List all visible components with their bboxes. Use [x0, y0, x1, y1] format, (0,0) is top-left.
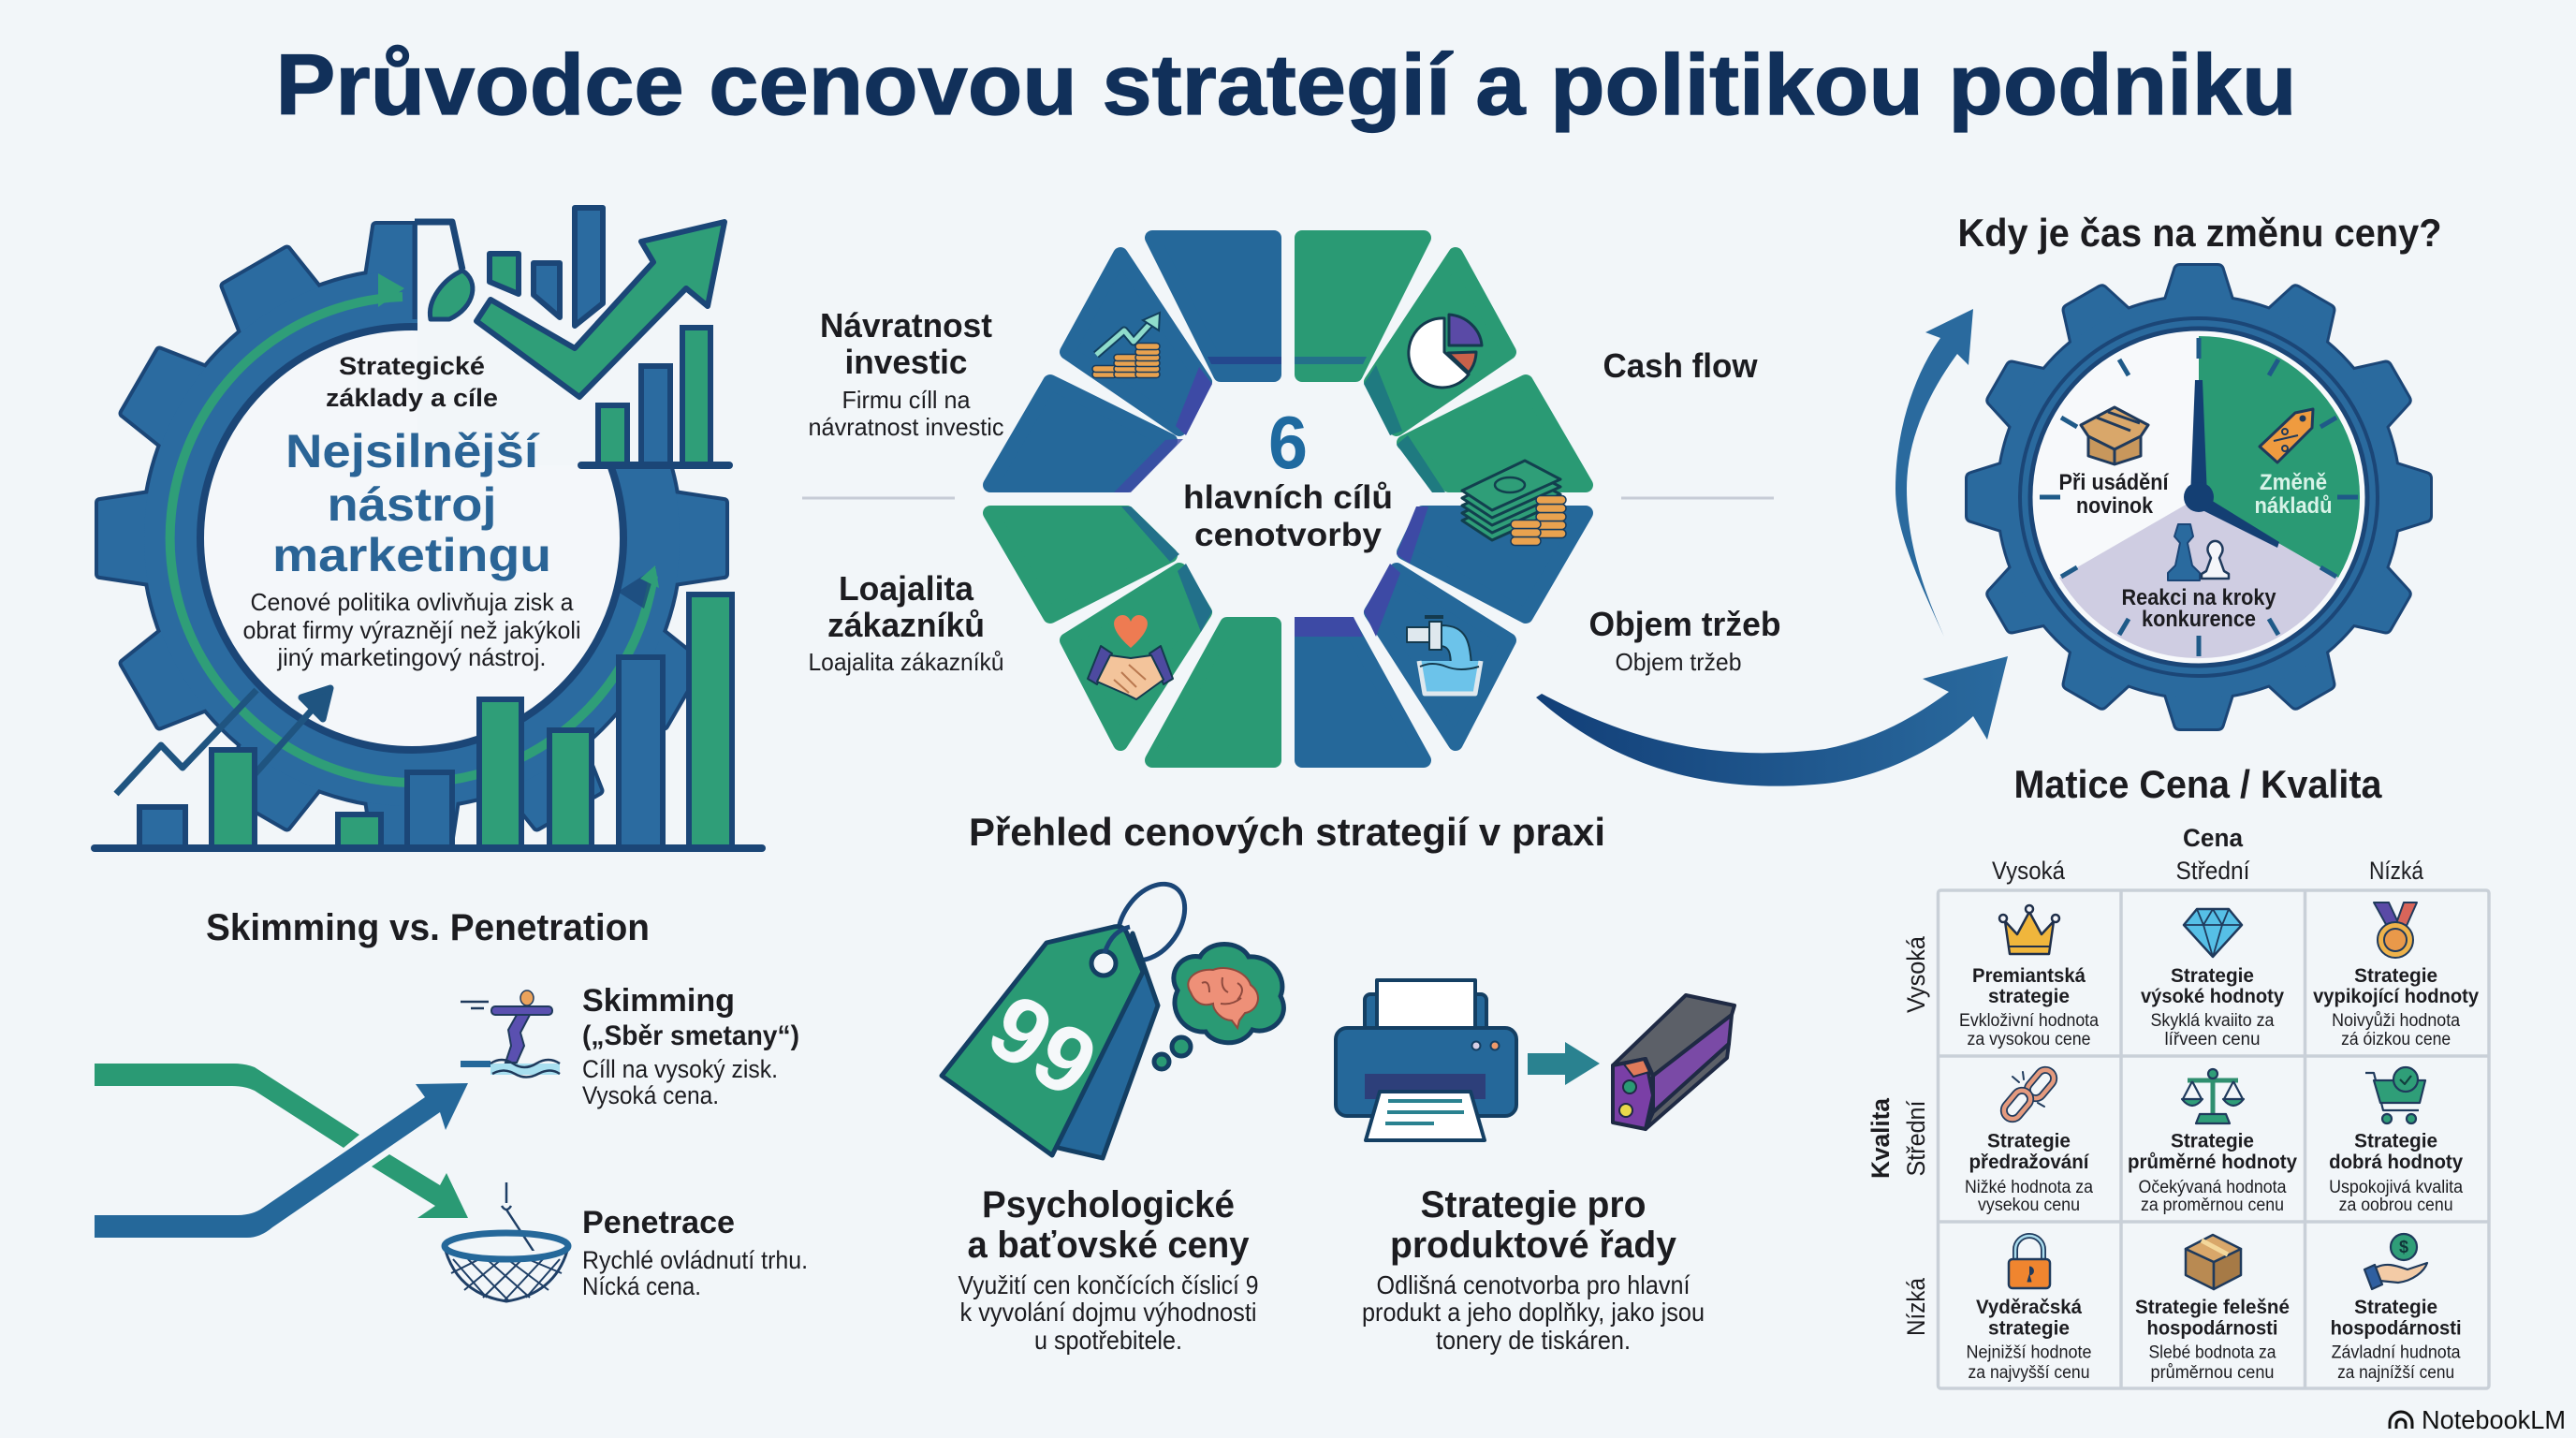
panel: price quality matrix: [1866, 762, 2489, 1388]
cell: outstanding value strategy: Strategie: [2354, 965, 2437, 987]
icon: medal: [2374, 902, 2417, 958]
icon: growth and coins: [1092, 313, 1160, 378]
icon: shopping cart: [2365, 1067, 2425, 1123]
heading: strongest marketing tool: nástroj: [328, 478, 496, 531]
label: sales volume: [1589, 605, 1780, 676]
cell: high value strategy: Skyklá kvaiito za: [2151, 1011, 2275, 1031]
cell: premium strategy: strategie: [1988, 986, 2070, 1007]
icon: broken chain: [2000, 1066, 2057, 1123]
cell: overcharging strategy: Nižké hodnota za: [1965, 1178, 2093, 1197]
cell: average value strategy: [2128, 1069, 2297, 1215]
text: pricing policy description: jiný marketingový nástroj.: [277, 643, 547, 671]
axis: price: Nízká: [2369, 857, 2424, 885]
icon: chess pieces: [2168, 524, 2229, 580]
hexagon segments: [990, 238, 1586, 760]
text: psychological pricing: u spotřebitele.: [1034, 1326, 1182, 1355]
cell: false economy strategy: [2135, 1235, 2290, 1383]
icon: padlock: [2009, 1236, 2050, 1288]
cell: average value strategy: Strategie: [2171, 1131, 2254, 1152]
arrow: printer to toner: [1528, 1042, 1600, 1085]
panel: skimming vs penetration: [95, 907, 808, 1301]
arrow: upward curved arrow: [1895, 309, 1973, 637]
cell: premium strategy: Premiantská: [1972, 965, 2086, 987]
text: penetration: Penetrace: [582, 1205, 735, 1240]
axis: quality: Vysoká: [1902, 935, 1930, 1013]
cell: outstanding value strategy: zá óizkou cene: [2341, 1030, 2451, 1049]
panel: pricing strategies in practice: [942, 810, 1734, 1355]
icon: hand with coin: [2364, 1234, 2427, 1289]
axis: price: Cena: [2183, 824, 2244, 852]
icon: rising green arrow: [476, 222, 724, 397]
label: cash flow: Cash flow: [1603, 346, 1758, 385]
text: penetration: [582, 1205, 808, 1300]
bar chart: bottom bars: [95, 594, 762, 848]
text: penetration: Nícká cena.: [582, 1272, 701, 1300]
text: psychological pricing: Psychologické: [982, 1184, 1235, 1225]
clock sector: costs: [2199, 336, 2360, 578]
panel: six pricing goals hexagon: [802, 238, 1780, 760]
cell: premium strategy: [1959, 905, 2099, 1049]
label: customer loyalty: [809, 569, 1003, 676]
cell: average value strategy: za proměrnou cenu: [2141, 1196, 2284, 1215]
heading: strongest marketing tool: marketingu: [272, 529, 551, 581]
cell: false economy strategy: průměrnou cenu: [2151, 1363, 2275, 1383]
axis: price: Vysoká: [1992, 857, 2066, 885]
text: competitor reaction: konkurence: [2142, 607, 2256, 632]
axis: price: Střední: [2175, 857, 2250, 885]
cell: economy strategy: hospodárnosti: [2331, 1318, 2462, 1339]
cell: economy strategy: $: [2399, 1238, 2408, 1256]
icon: price tag: [2260, 409, 2313, 462]
cell: overcharging strategy: Strategie: [1987, 1131, 2071, 1152]
text: strategic label: základy a cíle: [326, 384, 498, 412]
cell: extortion strategy: Vyděračská: [1976, 1297, 2082, 1318]
cell: extortion strategy: [1966, 1236, 2091, 1383]
clock sector: competitors: [2059, 497, 2338, 658]
icon: price tags 99: 99: [971, 974, 1115, 1118]
cell: high value strategy: lířveen cenu: [2164, 1030, 2260, 1049]
cell: overcharging strategy: vysekou cenu: [1978, 1196, 2080, 1215]
heading: skimming vs penetration: Skimming vs. Penetration: [206, 907, 650, 948]
heading: matrix: Matice Cena / Kvalita: [2014, 762, 2382, 806]
icon: money stack with coins: [1462, 461, 1566, 545]
cell: outstanding value strategy: vypikojící hodnoty: [2313, 986, 2479, 1007]
cell: extortion strategy: za najvyšší cenu: [1968, 1363, 2089, 1383]
icon: top rising bars: [490, 208, 603, 326]
text: competitor reaction: [2121, 585, 2276, 632]
text: cost change: Změně: [2260, 470, 2327, 495]
text: product line strategies: [1362, 1184, 1705, 1355]
text: skimming: Cíll na vysoký zisk.: [582, 1055, 778, 1083]
axis: quality: Střední: [1902, 1100, 1930, 1176]
text: skimming: Vysoká cena.: [582, 1081, 719, 1109]
text: penetration: Rychlé ovládnutí trhu.: [582, 1246, 808, 1274]
text: strategic label: [326, 352, 498, 412]
heading: when to change price: Kdy je čas na změnu ceny?: [1958, 211, 2441, 255]
cell: extortion strategy: strategie: [1988, 1318, 2070, 1339]
label: return on investment: Návratnost: [820, 306, 992, 345]
cell: economy strategy: [2331, 1234, 2462, 1383]
icon: clock gear: [1968, 266, 2430, 728]
icon: pie chart: [1409, 315, 1482, 388]
heading: pricing strategies overview: Přehled cenových strategií v praxi: [969, 810, 1605, 854]
cell: high value strategy: Strategie: [2171, 965, 2254, 987]
label: return on investment: [809, 306, 1003, 441]
heading: strongest marketing tool: [272, 425, 551, 581]
cell: high value strategy: výsoké hodnoty: [2141, 986, 2284, 1007]
cell: premium strategy: za vysokou cene: [1968, 1030, 2091, 1049]
matrix grid: [1938, 890, 2489, 1388]
text: skimming: („Sběr smetany“): [582, 1020, 799, 1051]
text: new products: Při usádění: [2059, 470, 2170, 495]
cell: false economy strategy: Strategie felešné: [2135, 1297, 2290, 1318]
label: return on investment: Firmu cíll na: [842, 386, 971, 414]
hexagon inner bands: [1114, 357, 1445, 637]
text: skimming: [582, 983, 799, 1109]
label: customer loyalty: Loajalita: [839, 569, 974, 608]
icon: open box: [2081, 407, 2148, 464]
cell: good value strategy: dobrá hodnoty: [2329, 1152, 2463, 1173]
axis: price: [1992, 824, 2424, 885]
cell: economy strategy: Strategie: [2354, 1297, 2437, 1318]
arrow: green down to penetration: [95, 1064, 468, 1218]
axis: quality: Kvalita: [1866, 1097, 1895, 1179]
icon: cardboard box: [2186, 1235, 2241, 1289]
panel: strategic foundations gear: [84, 178, 777, 888]
text: product line strategies: tonery de tiskáren.: [1436, 1326, 1631, 1355]
cell: outstanding value strategy: [2313, 902, 2479, 1049]
icon: green arc arrowheads: [378, 273, 659, 609]
icon: thought bubble with brain: [1154, 944, 1283, 1069]
cell: outstanding value strategy: Noivyůži hodnota: [2332, 1011, 2460, 1031]
cell: good value strategy: za oobrou cenu: [2339, 1196, 2453, 1215]
icon: handshake with heart: [1088, 615, 1173, 699]
label: customer loyalty: Loajalita zákazníků: [809, 648, 1003, 676]
text: product line strategies: produktové řady: [1390, 1225, 1677, 1266]
logo: NotebookLM: NotebookLM: [2422, 1405, 2566, 1434]
text: psychological pricing: a baťovské ceny: [968, 1225, 1250, 1266]
icon: landing net: [445, 1182, 568, 1301]
text: product line strategies: produkt a jeho doplňky, jako jsou: [1362, 1298, 1705, 1327]
text: pricing policy description: [243, 588, 580, 671]
center label: six goals: [1183, 401, 1393, 553]
label: sales volume: Objem tržeb: [1616, 648, 1741, 676]
icon: printer: [1336, 980, 1516, 1140]
arrow: curved connector from hexagon to clock gear: [1536, 656, 2008, 786]
label: customer loyalty: zákazníků: [827, 606, 985, 644]
cell: false economy strategy: hospodárnosti: [2147, 1318, 2278, 1339]
cell: false economy strategy: Slebé bodnota za: [2149, 1343, 2276, 1363]
icon: large gear: [98, 225, 725, 852]
text: cost change: nákladů: [2254, 493, 2333, 519]
cell: economy strategy: za najnížší cenu: [2337, 1363, 2454, 1383]
cell: average value strategy: průměrné hodnoty: [2128, 1152, 2297, 1173]
gear cutout for rising chart: [417, 178, 754, 465]
cell: overcharging strategy: předražování: [1969, 1152, 2090, 1173]
text: product line strategies: Odlišná cenotvorba pro hlavní: [1376, 1270, 1690, 1299]
icon: toner cartridge: [1613, 995, 1734, 1129]
cell: good value strategy: Uspokojivá kvalita: [2329, 1178, 2463, 1197]
label: return on investment: návratnost investic: [809, 413, 1003, 441]
text: psychological pricing: k vyvolání dojmu výhodnosti: [960, 1298, 1256, 1327]
text: new products: novinok: [2076, 493, 2154, 519]
icon: small trend arrows: [116, 688, 330, 794]
text: skimming: Skimming: [582, 983, 735, 1019]
icon: price tags 99: [942, 872, 1198, 1158]
text: pricing policy description: Cenové politika ovlivňuja zisk a: [251, 588, 574, 616]
arrow: blue up to skimming: [95, 1083, 468, 1238]
text: product line strategies: Strategie pro: [1421, 1184, 1646, 1225]
icon: diamond: [2184, 909, 2242, 957]
label: sales volume: Objem tržeb: [1589, 605, 1780, 643]
text: competitor reaction: Reakci na kroky: [2121, 585, 2276, 610]
center label: six goals: hlavních cílů: [1183, 479, 1393, 516]
axis: quality: [1866, 935, 1930, 1336]
cell: average value strategy: Očekývaná hodnota: [2138, 1178, 2287, 1197]
heading: strongest marketing tool: Nejsilnější: [285, 425, 540, 477]
label: return on investment: investic: [844, 343, 968, 381]
icon: crown: [1999, 905, 2059, 954]
cell: premium strategy: Evkloživní hodnota: [1959, 1011, 2099, 1031]
clock hands: [2184, 380, 2279, 548]
center label: six goals: cenotvorby: [1194, 517, 1383, 553]
panel: when to change price: [1895, 211, 2441, 728]
title: Průvodce cenovou strategií a politikou podniku: [275, 37, 2297, 133]
bar chart: upper right bars: [581, 328, 729, 465]
text: new products: [2059, 470, 2170, 519]
text: strategic label: Strategické: [339, 352, 485, 380]
cell: high value strategy: [2141, 909, 2284, 1049]
center label: six goals: 6: [1268, 401, 1308, 484]
icon: water tap and basin: [1407, 617, 1481, 694]
text: psychological pricing: [959, 1184, 1258, 1355]
text: cost change: [2254, 470, 2333, 519]
cell: economy strategy: Závladní hudnota: [2332, 1343, 2461, 1363]
icon: half tooth outline and leaf: [415, 222, 473, 319]
cell: good value strategy: Strategie: [2354, 1131, 2437, 1152]
axis: quality: Nízká: [1902, 1277, 1930, 1336]
cell: extortion strategy: Nejnižší hodnote: [1966, 1343, 2091, 1363]
icon: skimmer: [461, 990, 560, 1077]
cell: good value strategy: [2329, 1067, 2463, 1215]
icon: scales: [2182, 1069, 2244, 1123]
text: pricing policy description: obrat firmy výraznějí než jakýkoli: [243, 616, 580, 644]
text: psychological pricing: Využití cen končících číslicí 9: [959, 1270, 1258, 1299]
cell: overcharging strategy: [1965, 1066, 2093, 1215]
